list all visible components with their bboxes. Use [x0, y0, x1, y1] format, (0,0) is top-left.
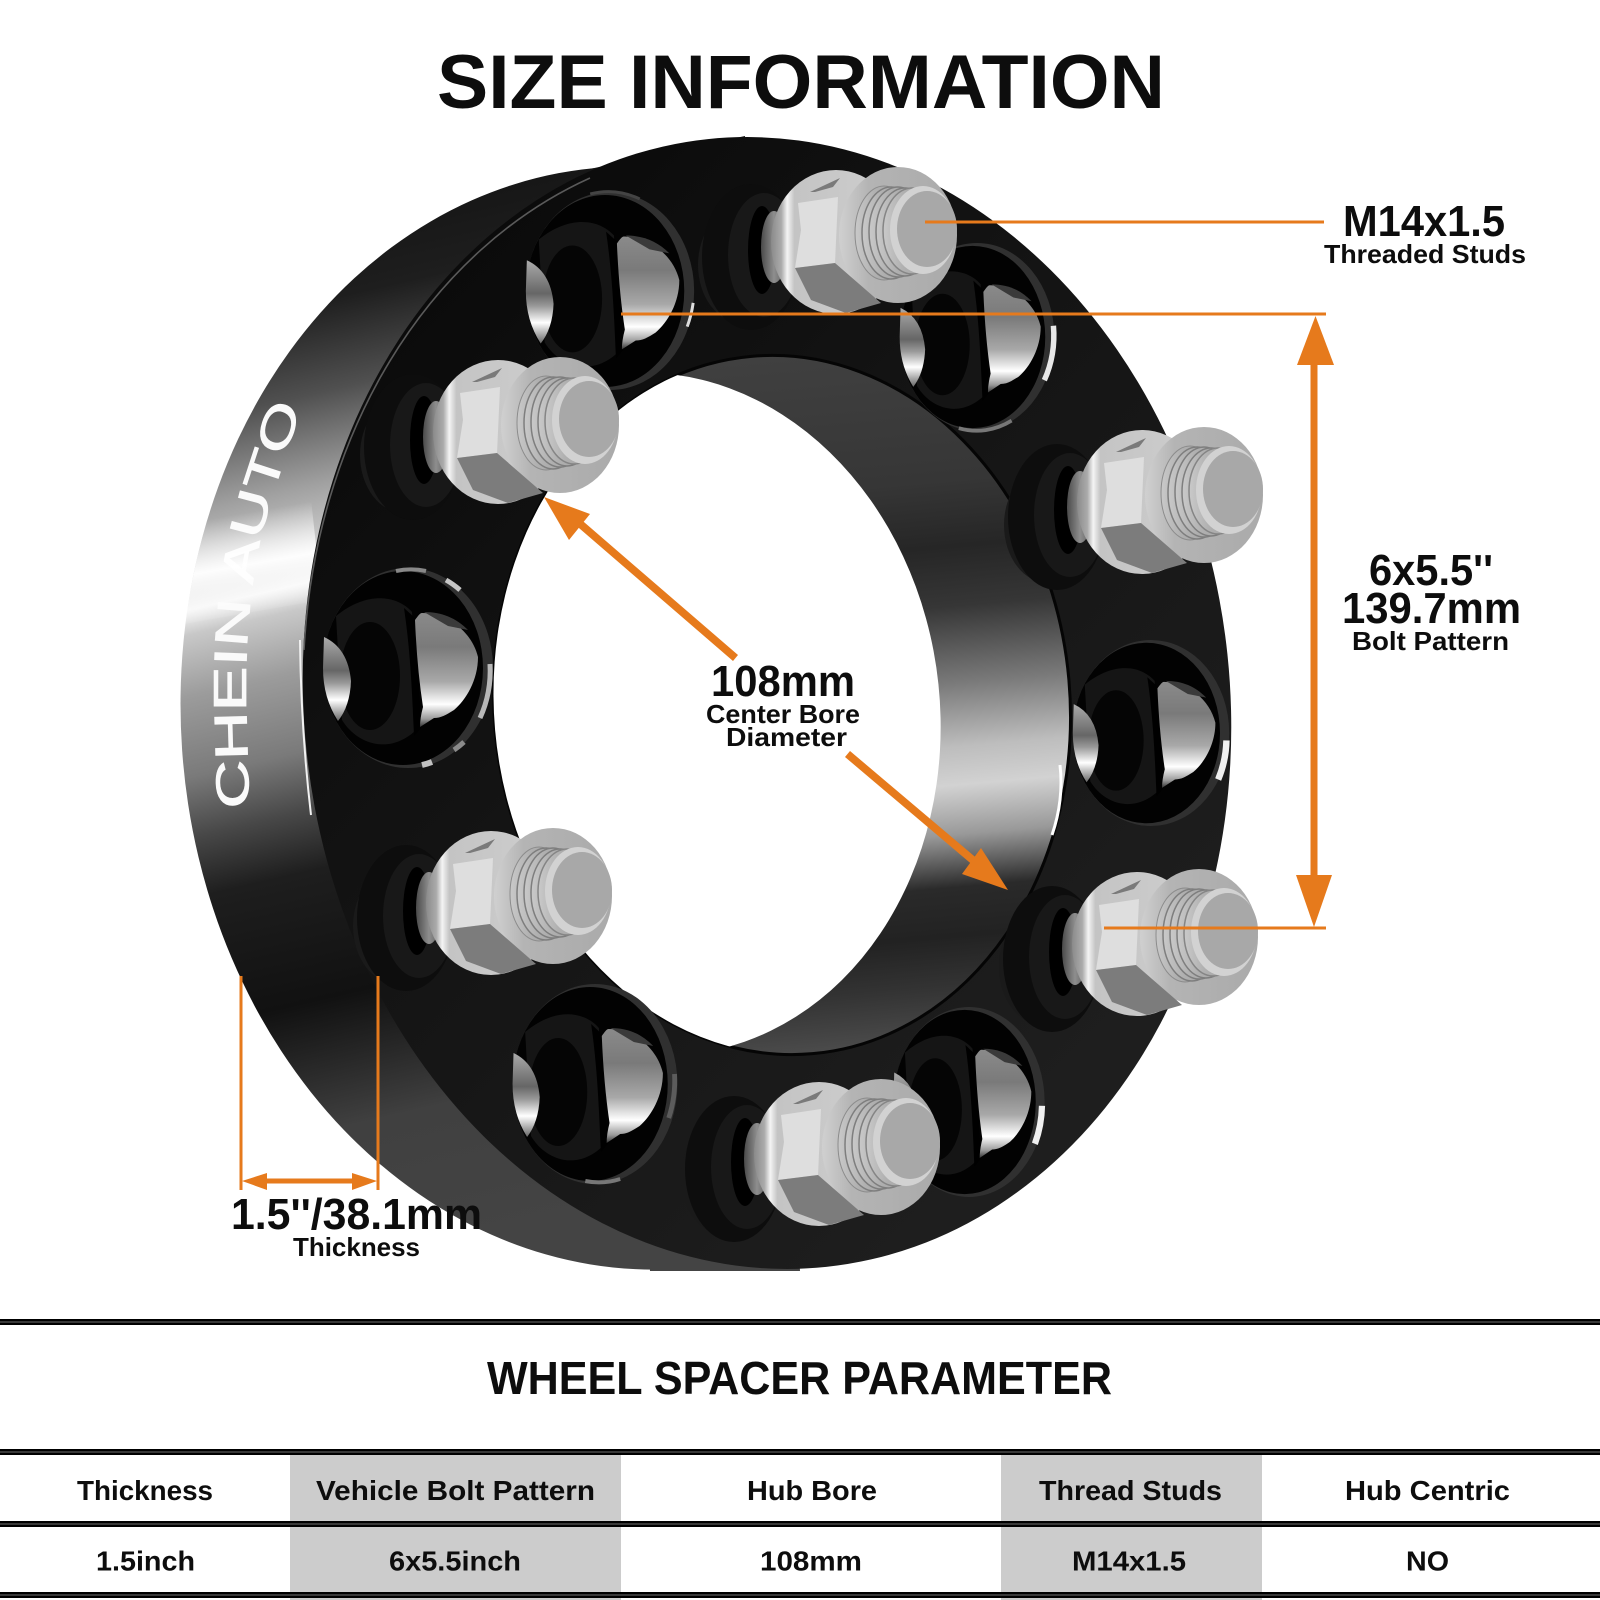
table header row: Hub Centric — [1345, 1475, 1510, 1506]
open bolt hole right — [1073, 640, 1229, 826]
table header row: Thread Studs — [1039, 1475, 1222, 1506]
callout: bolt pattern — [621, 312, 1521, 930]
bottom extension line — [1104, 926, 1326, 930]
value metric: 139.7mm — [1342, 584, 1521, 633]
open bolt hole lower left — [513, 984, 677, 1184]
table value row: 108mm — [760, 1546, 862, 1576]
value: 6x5.5'' — [1369, 546, 1493, 595]
title: SIZE INFORMATION — [437, 40, 1165, 125]
caption: Threaded Studs — [1324, 239, 1526, 269]
upper arrow — [544, 497, 738, 661]
open bolt hole upper right — [900, 243, 1054, 431]
caption line 2: Diameter — [726, 722, 847, 752]
table header row — [77, 1475, 1510, 1506]
callout: centre bore — [544, 497, 1008, 890]
parameter section — [0, 1319, 1600, 1600]
spacer outer cylinder wall — [144, 135, 1140, 1301]
caption line 1: Center Bore — [706, 699, 860, 729]
table header row: Vehicle Bolt Pattern — [316, 1475, 595, 1506]
table value row: NO — [1406, 1546, 1449, 1576]
value: M14x1.5 — [1343, 197, 1505, 246]
table header row: Hub Bore — [747, 1475, 877, 1506]
threaded stud right — [1004, 427, 1263, 590]
centre bore inner wall — [465, 331, 1099, 1079]
table value row: M14x1.5 — [1072, 1546, 1186, 1576]
table value row: 6x5.5inch — [389, 1546, 521, 1576]
open bolt hole lower right — [893, 1007, 1045, 1197]
threaded stud bottom — [681, 1079, 940, 1242]
leader line — [925, 220, 1324, 224]
highlighted table columns — [290, 1455, 1262, 1600]
value: 108mm — [711, 657, 855, 706]
centre bore opening — [493, 375, 941, 1046]
extension lines — [240, 976, 380, 1190]
spacer front face — [247, 91, 1287, 1315]
table header row: Thickness — [77, 1475, 213, 1506]
callout: threaded studs — [925, 197, 1526, 269]
caption: Bolt Pattern — [1352, 626, 1509, 656]
caption: Thickness — [293, 1232, 420, 1262]
table value row: 1.5inch — [96, 1546, 195, 1576]
threaded stud upper left — [360, 357, 619, 520]
top extension line — [621, 312, 1326, 316]
brand text on rim: CHEIN AUTO — [214, 404, 296, 806]
table value row — [96, 1546, 1449, 1576]
open bolt hole upper left — [526, 192, 694, 390]
wheel spacer product illustration — [180, 136, 1263, 1271]
section rules — [0, 1319, 1600, 1598]
threaded stud lower left — [353, 828, 612, 991]
double arrow — [1296, 316, 1334, 927]
section heading: WHEEL SPACER PARAMETER — [487, 1352, 1112, 1404]
threaded stud lower right — [999, 869, 1258, 1032]
double arrow — [242, 1173, 377, 1190]
rim highlight band — [188, 507, 316, 603]
bore edge highlight — [1052, 765, 1061, 835]
lower arrow — [845, 751, 1008, 890]
value: 1.5''/38.1mm — [231, 1190, 482, 1239]
threaded stud top — [698, 167, 957, 330]
callout: thickness — [231, 976, 482, 1262]
open bolt hole left — [323, 568, 493, 768]
